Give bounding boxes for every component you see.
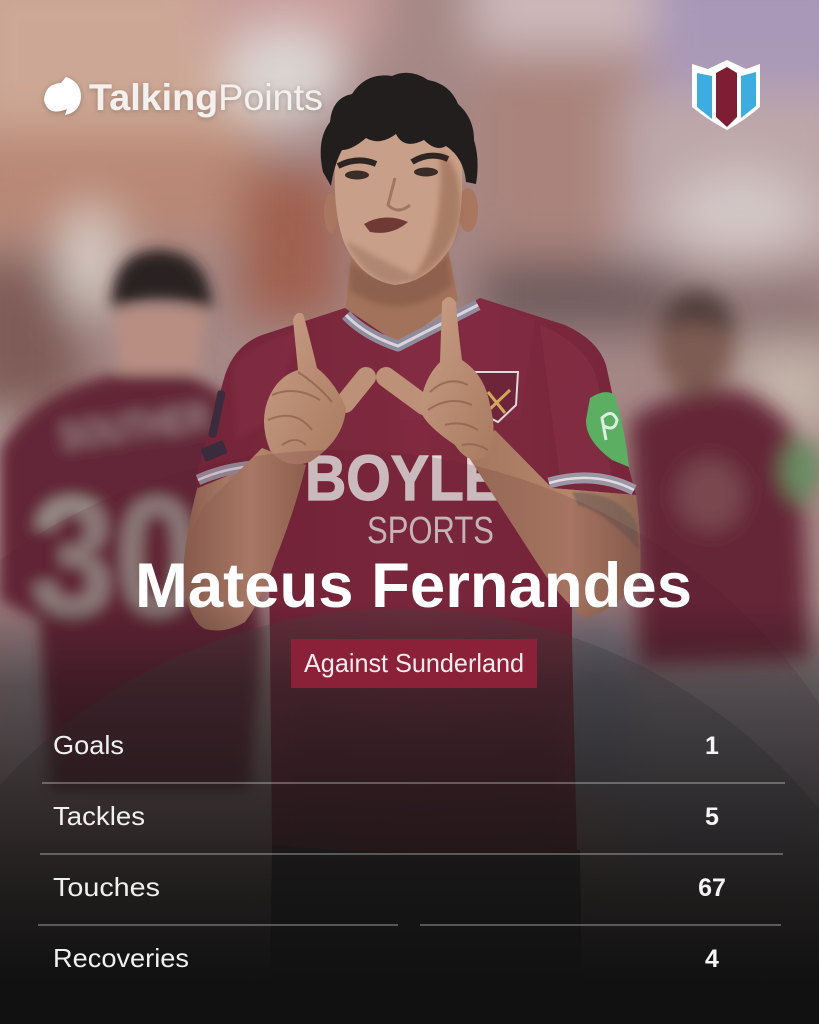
player — [183, 73, 640, 1020]
background player left, number 30: 30 — [30, 462, 200, 652]
neck shadow — [350, 255, 452, 306]
sleeve patch — [200, 390, 228, 462]
stats table — [38, 730, 785, 973]
row: recoveries: 4 — [705, 945, 719, 973]
tattoo — [572, 492, 639, 550]
club crest — [474, 372, 518, 422]
right forearm — [468, 430, 640, 618]
mouth — [364, 217, 408, 233]
logo mark — [44, 77, 81, 115]
row: goals — [53, 730, 719, 760]
left forearm — [183, 448, 306, 630]
background player left, number 30: SOUTHER — [57, 396, 212, 459]
row: touches — [53, 872, 726, 902]
background player right — [630, 290, 819, 665]
upper arm: right — [550, 488, 640, 600]
row: recoveries: Recoveries — [53, 943, 189, 973]
row: touches: 67 — [698, 874, 726, 902]
jersey body and sleeves — [195, 298, 636, 854]
upper arm: left — [183, 465, 262, 600]
bottom overlay: grey dome — [0, 609, 819, 1024]
sleeve badge — [586, 392, 629, 467]
player name: Mateus Fernandes — [135, 551, 692, 621]
row: goals: 1 — [705, 732, 719, 760]
shorts — [270, 845, 582, 1020]
sleeve cuffs — [198, 466, 634, 490]
hair — [321, 73, 478, 186]
row: tackles: 5 — [705, 803, 719, 831]
row: tackles — [53, 801, 719, 831]
head — [321, 73, 478, 285]
neck — [345, 250, 458, 345]
row: goals: Goals — [53, 730, 124, 760]
logo wordmark: TalkingPoints — [89, 77, 323, 118]
club shield — [692, 60, 760, 130]
match label — [291, 639, 537, 688]
match label: Against Sunderland — [304, 648, 524, 678]
face — [335, 125, 462, 285]
ears — [324, 188, 478, 233]
eyes and brows — [338, 156, 448, 180]
left hand — [264, 313, 366, 464]
logo: TalkingPoints — [44, 77, 323, 118]
sponsor: BOYLE: BOYLE — [305, 442, 502, 514]
right hand — [386, 297, 494, 460]
background player left, number 30 — [0, 250, 262, 790]
row: touches: Touches — [53, 872, 160, 902]
collar — [346, 305, 478, 346]
row: recoveries — [53, 943, 719, 973]
bottom overlay: maroon arc — [0, 450, 819, 1024]
nose — [388, 178, 410, 210]
row: tackles: Tackles — [53, 801, 145, 831]
bottom overlay: dark fade — [0, 600, 819, 1024]
sponsor: SPORTS: SPORTS — [367, 510, 494, 552]
